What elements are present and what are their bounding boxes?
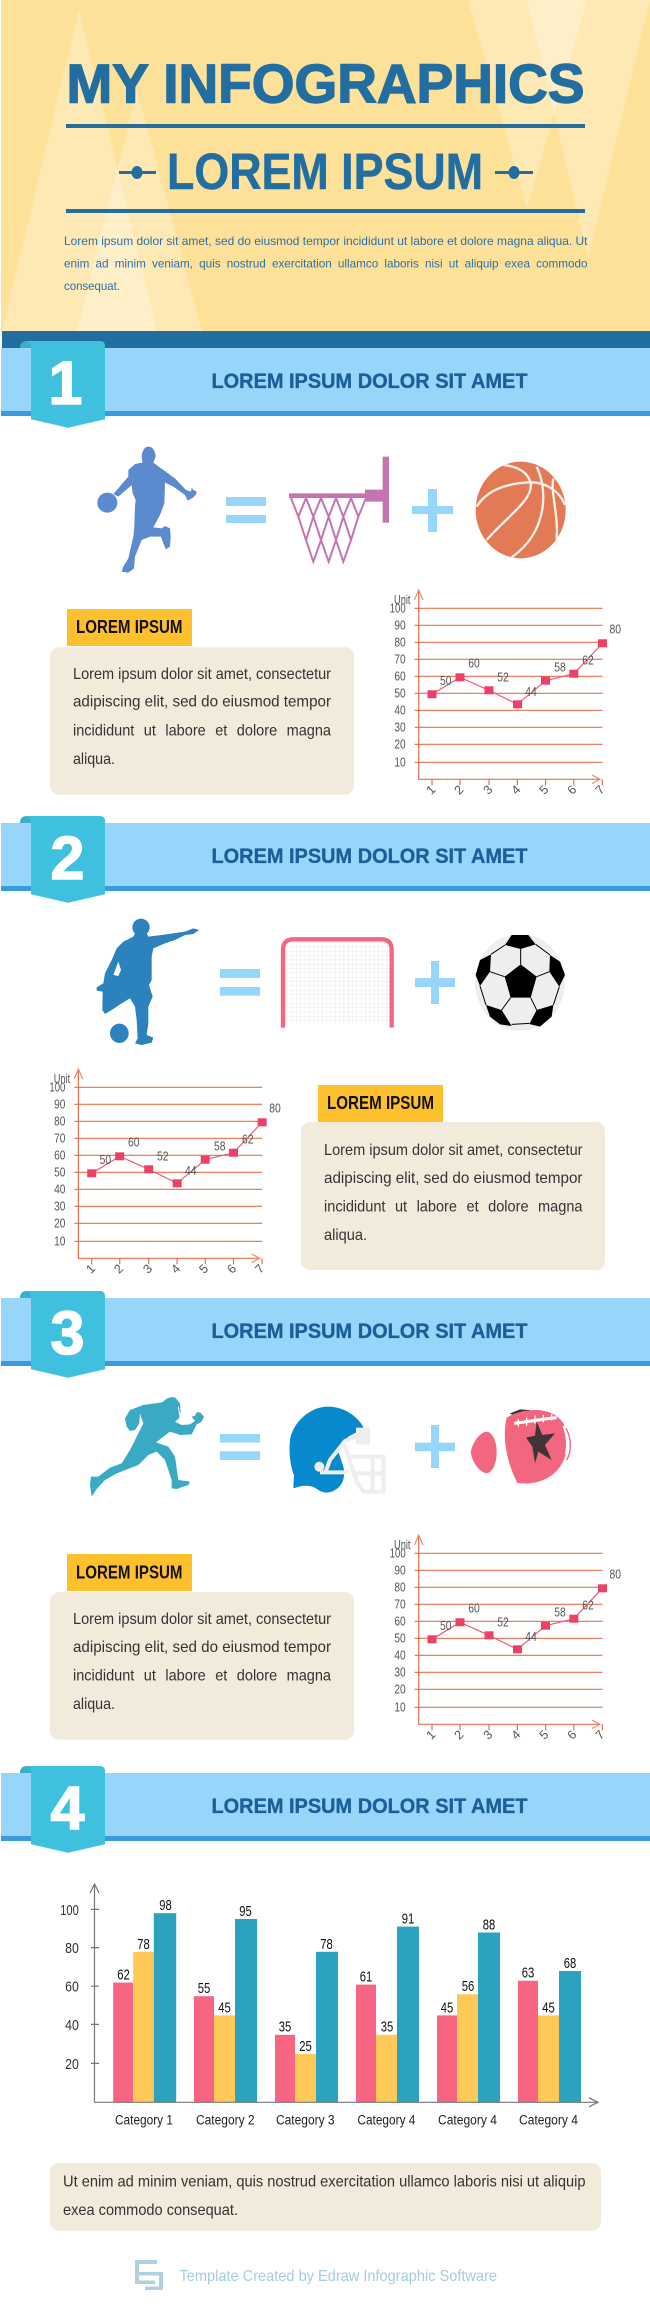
section heading: LOREM IPSUM DOLOR SIT AMET	[212, 1795, 528, 1818]
icon: equals	[220, 969, 260, 996]
line chart 1	[390, 590, 621, 797]
line chart 3: Unit	[394, 1538, 411, 1552]
section heading: LOREM IPSUM DOLOR SIT AMET	[212, 845, 528, 868]
icon: football runner	[90, 1397, 204, 1497]
line chart 2: 70	[54, 1132, 65, 1146]
value labels: 78	[320, 1936, 333, 1953]
icon: basketball player	[97, 447, 197, 573]
footer	[135, 2260, 497, 2290]
value labels: 45	[441, 1999, 453, 2016]
line chart 3: 62	[582, 1598, 594, 1612]
line chart 3: 20	[394, 1682, 406, 1696]
line chart 1: 60	[468, 656, 480, 670]
icon: edraw logo	[135, 2260, 163, 2290]
line chart 1: 50	[440, 674, 451, 688]
line chart 2	[49, 1069, 281, 1276]
line chart 3: 44	[525, 1630, 537, 1644]
line chart 2: 80	[269, 1101, 281, 1115]
icon: basketball hoop	[289, 457, 389, 562]
line chart 3: 10	[394, 1700, 406, 1714]
value labels: 88	[483, 1916, 495, 1934]
line chart 1: 6	[565, 783, 579, 797]
value labels: 78	[137, 1936, 150, 1953]
axis labels: 40	[65, 2017, 79, 2034]
icon: soccer player	[97, 919, 199, 1045]
section heading: LOREM IPSUM DOLOR SIT AMET	[212, 1320, 528, 1343]
line chart 1: 2	[452, 783, 466, 797]
category labels: Category 4	[438, 2113, 497, 2128]
line chart 2: 1	[83, 1262, 98, 1276]
category labels: Category 1	[115, 2113, 173, 2128]
value labels: 61	[360, 1968, 372, 1986]
line chart 2: 2	[111, 1262, 126, 1276]
value labels: 55	[198, 1980, 210, 1997]
body text: incididunt ut labore et dolore magna	[73, 723, 331, 740]
line chart 1: 80	[610, 622, 621, 636]
line chart 3: 1	[424, 1728, 438, 1742]
tag: LOREM IPSUM	[76, 617, 182, 637]
panel: text card 2	[301, 1085, 605, 1270]
line chart 2: 6	[224, 1262, 239, 1276]
line chart 2: 40	[54, 1182, 65, 1196]
body text	[73, 1611, 332, 1713]
body text: adipiscing elit, sed do eiusmod tempor	[73, 694, 332, 711]
line chart 1: 20	[394, 738, 406, 752]
bar chart	[60, 1884, 598, 2128]
line chart 2: 60	[128, 1136, 139, 1150]
section heading: LOREM IPSUM DOLOR SIT AMET	[212, 370, 528, 393]
category labels: Category 3	[276, 2113, 335, 2128]
line chart 3	[390, 1535, 621, 1742]
line chart 2: 90	[54, 1098, 65, 1112]
body text: aliqua.	[73, 1696, 115, 1713]
tag: LOREM IPSUM	[76, 1562, 182, 1582]
line chart 3: 30	[394, 1666, 406, 1680]
icon: american football	[471, 1409, 570, 1484]
body text	[73, 666, 332, 768]
value labels: 91	[402, 1910, 414, 1928]
tag	[318, 1085, 443, 1122]
section 1 banner	[1, 341, 650, 428]
line chart 1: 52	[497, 670, 509, 684]
line chart 1: 70	[394, 652, 406, 666]
value labels: 35	[381, 2019, 393, 2036]
category labels	[115, 2113, 578, 2128]
icon: plus	[415, 961, 455, 1004]
line chart 3: 80	[610, 1567, 621, 1581]
body text	[324, 1142, 583, 1244]
icon: basketball	[476, 462, 566, 558]
icon: equals	[220, 1434, 260, 1460]
line chart 1: 58	[554, 660, 566, 674]
value labels: 45	[218, 1999, 231, 2016]
line chart 3: 90	[394, 1564, 406, 1578]
value labels: 56	[462, 1978, 474, 1995]
axis labels: 20	[65, 2056, 79, 2073]
line chart 2: 20	[54, 1216, 65, 1230]
line chart 3: 60	[468, 1602, 480, 1616]
line chart 1: 7	[593, 783, 607, 797]
body text: Lorem ipsum dolor sit amet, consectetur	[73, 666, 332, 683]
body text: aliqua.	[73, 751, 115, 768]
axes	[90, 1884, 598, 2107]
line chart 3: 4	[509, 1728, 523, 1742]
section number: 2	[51, 824, 84, 892]
value labels: 35	[279, 2019, 291, 2036]
line chart 2: 5	[196, 1262, 211, 1276]
icon: plus	[412, 489, 453, 532]
value labels: 68	[564, 1955, 576, 1972]
line chart 2: 4	[168, 1262, 183, 1276]
line chart 3: 40	[394, 1648, 406, 1662]
value labels	[117, 1897, 576, 2055]
line chart 1: 62	[582, 653, 594, 667]
line chart 1: 1	[424, 783, 438, 797]
line chart 2: 10	[54, 1234, 65, 1248]
line chart 2: Unit	[54, 1072, 71, 1086]
value labels: 62	[117, 1966, 130, 1984]
body text: adipiscing elit, sed do eiusmod tempor	[73, 1639, 332, 1656]
intro text: enim ad minim veniam, quis nostrud exercitation ullamco laboris nisi ut aliquip exea commodo	[64, 256, 588, 270]
footer text: Template Created by Edraw Infographic Software	[180, 2268, 497, 2285]
line chart 1: 80	[394, 636, 406, 650]
section number: 1	[49, 349, 82, 417]
value labels: 63	[522, 1965, 534, 1982]
tag: LOREM IPSUM	[327, 1093, 434, 1113]
line chart 1: 5	[537, 783, 551, 797]
tag	[67, 1554, 192, 1591]
line chart 1: 44	[525, 685, 537, 699]
value labels: 25	[299, 2038, 312, 2055]
category labels: Category 2	[196, 2113, 255, 2128]
icon: plus	[415, 1425, 455, 1468]
value labels: 45	[542, 1999, 555, 2016]
line chart 2: 52	[157, 1150, 168, 1164]
line chart 1: 40	[394, 704, 406, 718]
intro text: Lorem ipsum dolor sit amet, sed do eiusmod tempor incididunt ut labore et dolore magna aliqua. Ut	[64, 234, 588, 248]
line chart 3: 58	[554, 1606, 566, 1620]
icon: soccer ball	[475, 934, 565, 1031]
axis labels: 80	[65, 1940, 79, 1957]
panel: text card 3	[50, 1554, 354, 1740]
line chart 3: 80	[394, 1580, 406, 1594]
panel: text card 1	[50, 609, 354, 795]
section number: 4	[51, 1774, 85, 1842]
section 3 banner	[1, 1291, 650, 1378]
body text: adipiscing elit, sed do eiusmod tempor	[324, 1170, 583, 1187]
line chart 2: 7	[252, 1262, 267, 1276]
value labels: 98	[159, 1897, 172, 1914]
intro text: consequat.	[64, 279, 120, 293]
line chart 3: 5	[537, 1728, 551, 1742]
panel: header	[1, 0, 650, 331]
panel: bottom note: Ut enim ad minim veniam, quis nostrud exercitation ullamco laboris nisi ut aliquip	[63, 2174, 586, 2190]
section 2 banner	[1, 816, 650, 903]
section 4 banner	[1, 1766, 650, 1853]
line chart 2: 60	[54, 1148, 65, 1162]
line chart 3: 50	[394, 1632, 406, 1646]
line chart 2: 80	[54, 1114, 65, 1128]
title: MY INFOGRAPHICS	[66, 52, 584, 114]
body text: Lorem ipsum dolor sit amet, consectetur	[73, 1611, 332, 1628]
line chart 3: 7	[593, 1728, 607, 1742]
body text: incididunt ut labore et dolore magna	[73, 1668, 331, 1685]
line chart 1: 3	[481, 783, 495, 797]
axis labels: 100	[60, 1902, 79, 1919]
line chart 2: 30	[54, 1200, 65, 1214]
category labels: Category 4	[519, 2113, 578, 2128]
line chart 2: 50	[100, 1153, 111, 1167]
body text: Lorem ipsum dolor sit amet, consectetur	[324, 1142, 583, 1159]
line chart 2: 100	[49, 1080, 65, 1094]
value labels: 95	[239, 1903, 252, 1920]
icon: goal	[283, 939, 392, 1028]
subtitle: LOREM IPSUM	[167, 143, 483, 200]
intro text	[64, 234, 588, 293]
line chart 1: 60	[394, 670, 406, 684]
category labels: Category 4	[357, 2113, 416, 2128]
tag	[67, 609, 192, 646]
line chart 1: 10	[394, 756, 406, 770]
icon: equals	[226, 497, 266, 523]
line chart 1: 90	[394, 618, 406, 632]
panel: bottom note: exea commodo consequat.	[63, 2202, 238, 2219]
icon: helmet	[289, 1407, 383, 1492]
line chart 3: 60	[394, 1614, 406, 1628]
line chart 3: 3	[481, 1728, 495, 1742]
line chart 3: 6	[565, 1728, 579, 1742]
line chart 2: 3	[140, 1262, 155, 1276]
line chart 3: 100	[390, 1546, 406, 1560]
line chart 1: 30	[394, 720, 406, 734]
bars	[113, 1913, 581, 2102]
line chart 1: 4	[509, 783, 523, 797]
line chart 3: 52	[497, 1616, 509, 1630]
line chart 1: 50	[394, 686, 406, 700]
line chart 1: 100	[390, 602, 406, 616]
panel: bottom note	[50, 2163, 601, 2231]
body text: incididunt ut labore et dolore magna	[324, 1199, 583, 1216]
line chart 3: 50	[440, 1619, 451, 1633]
line chart 2: 58	[214, 1140, 225, 1154]
line chart 2: 62	[242, 1132, 253, 1146]
line chart 1: Unit	[394, 593, 411, 607]
line chart 2: 50	[54, 1166, 65, 1180]
line chart 2: 44	[185, 1164, 196, 1178]
body text: aliqua.	[324, 1227, 367, 1244]
line chart 3: 70	[394, 1598, 406, 1612]
section number: 3	[51, 1299, 84, 1367]
axis labels	[60, 1902, 79, 2073]
axis labels: 60	[65, 1979, 79, 1996]
line chart 3: 2	[452, 1728, 466, 1742]
